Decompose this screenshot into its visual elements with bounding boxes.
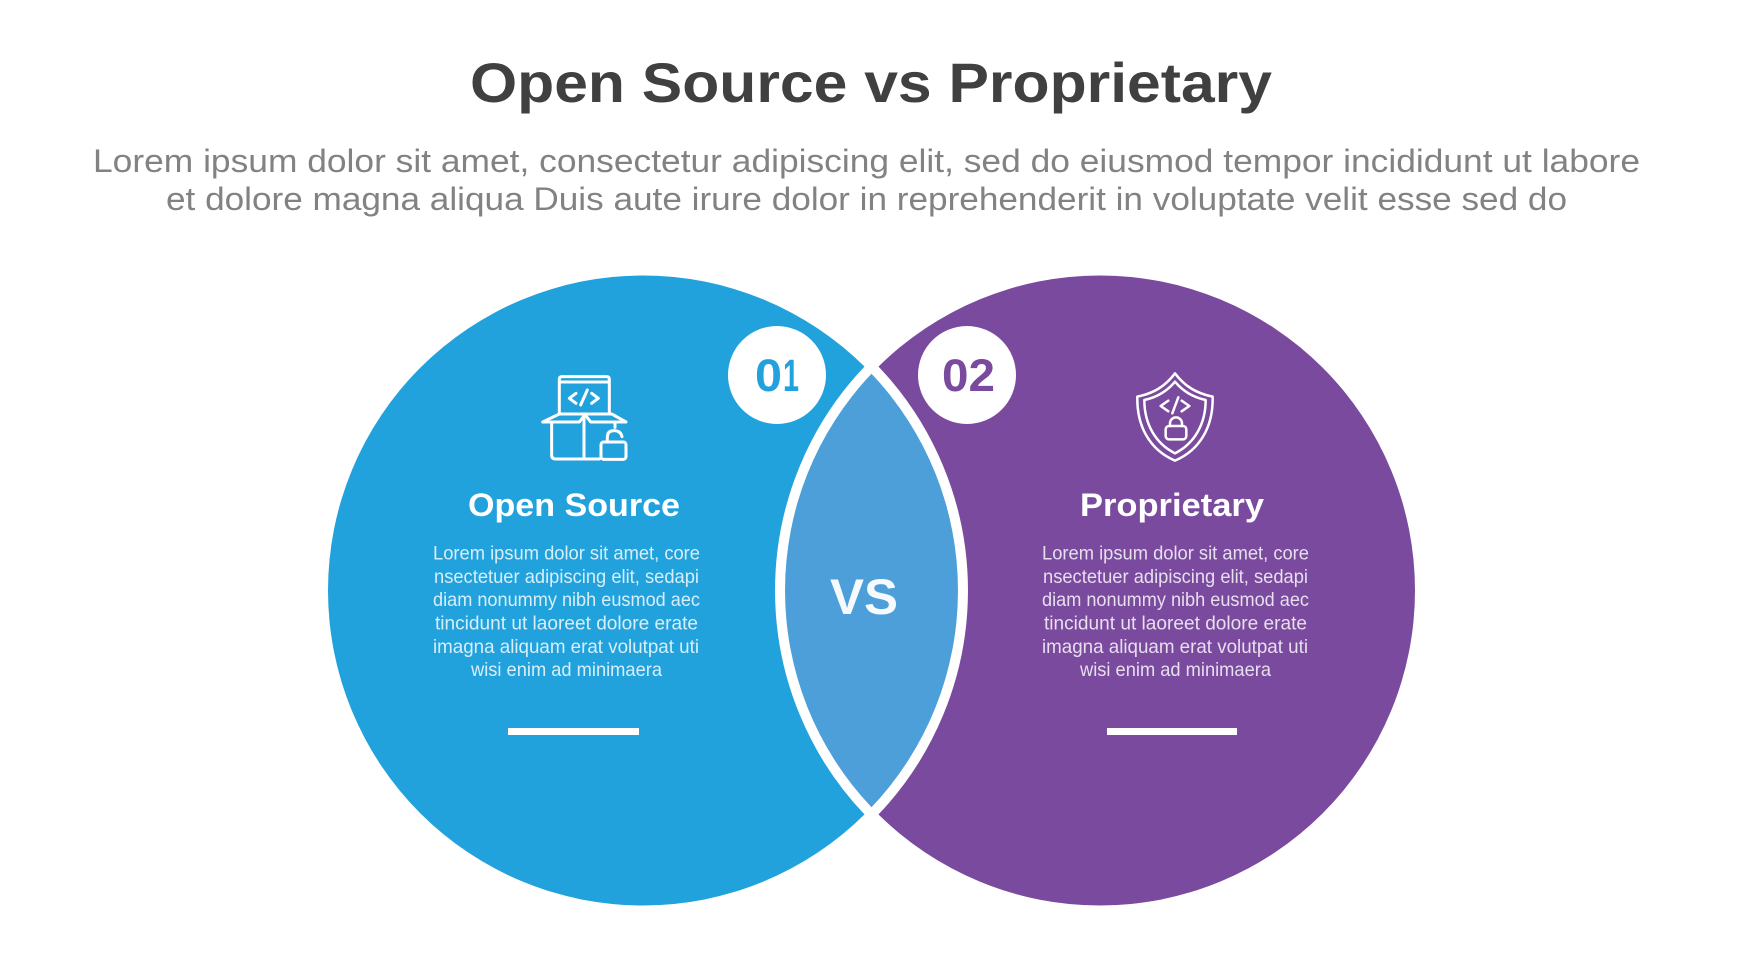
body text: proprietary [1042, 542, 1309, 681]
body text: open source: wisi enim ad minimaera [470, 659, 662, 681]
badge 01: 1 [783, 350, 799, 401]
body text: proprietary: imagna aliquam erat volutpat uti [1042, 636, 1308, 658]
body text: proprietary: wisi enim ad minimaera [1079, 659, 1271, 681]
body text: proprietary: diam nonummy nibh eusmod aec [1042, 589, 1309, 611]
underline bar: proprietary [1107, 728, 1237, 735]
body text: open source: diam nonummy nibh eusmod aec [433, 589, 700, 611]
subtitle text: Lorem ipsum dolor sit amet, consectetur adipiscing elit, sed do eiusmod tempor incididunt ut labore [93, 143, 1640, 179]
body text: proprietary: tincidunt ut laoreet dolore erate [1044, 612, 1307, 634]
title: Open Source vs Proprietary [470, 51, 1272, 114]
heading: open source: Open Source [468, 487, 680, 523]
heading: proprietary: Proprietary [1080, 487, 1264, 523]
body text: proprietary: Lorem ipsum dolor sit amet, core [1042, 542, 1309, 564]
badge 02: 02 [942, 350, 995, 401]
icon: shield with code and lock [1137, 373, 1213, 461]
panel: open source circle [328, 276, 958, 906]
VS label: VS [830, 569, 898, 625]
body text: open source: Lorem ipsum dolor sit amet, core [433, 542, 700, 564]
badge 01 [728, 326, 826, 424]
body text: proprietary: nsectetuer adipiscing elit, sedapi [1043, 566, 1308, 588]
underline bar: open source [508, 728, 639, 735]
body text: open source: tincidunt ut laoreet dolore erate [435, 612, 698, 634]
body text: open source: imagna aliquam erat volutpat uti [433, 636, 699, 658]
white outline of overlap [785, 374, 958, 807]
subtitle text: et dolore magna aliqua Duis aute irure dolor in reprehenderit in voluptate velit esse sed do [166, 181, 1567, 217]
badge 02 [918, 326, 1016, 424]
panel: overlap lens [785, 374, 958, 807]
subtitle text [93, 143, 1640, 217]
body text: open source: nsectetuer adipiscing elit, sedapi [434, 566, 699, 588]
panel: proprietary circle [785, 276, 1415, 906]
icon: open box with code window and lock [543, 377, 626, 459]
body text: open source [433, 542, 700, 681]
badge 01: 0 [755, 350, 782, 401]
